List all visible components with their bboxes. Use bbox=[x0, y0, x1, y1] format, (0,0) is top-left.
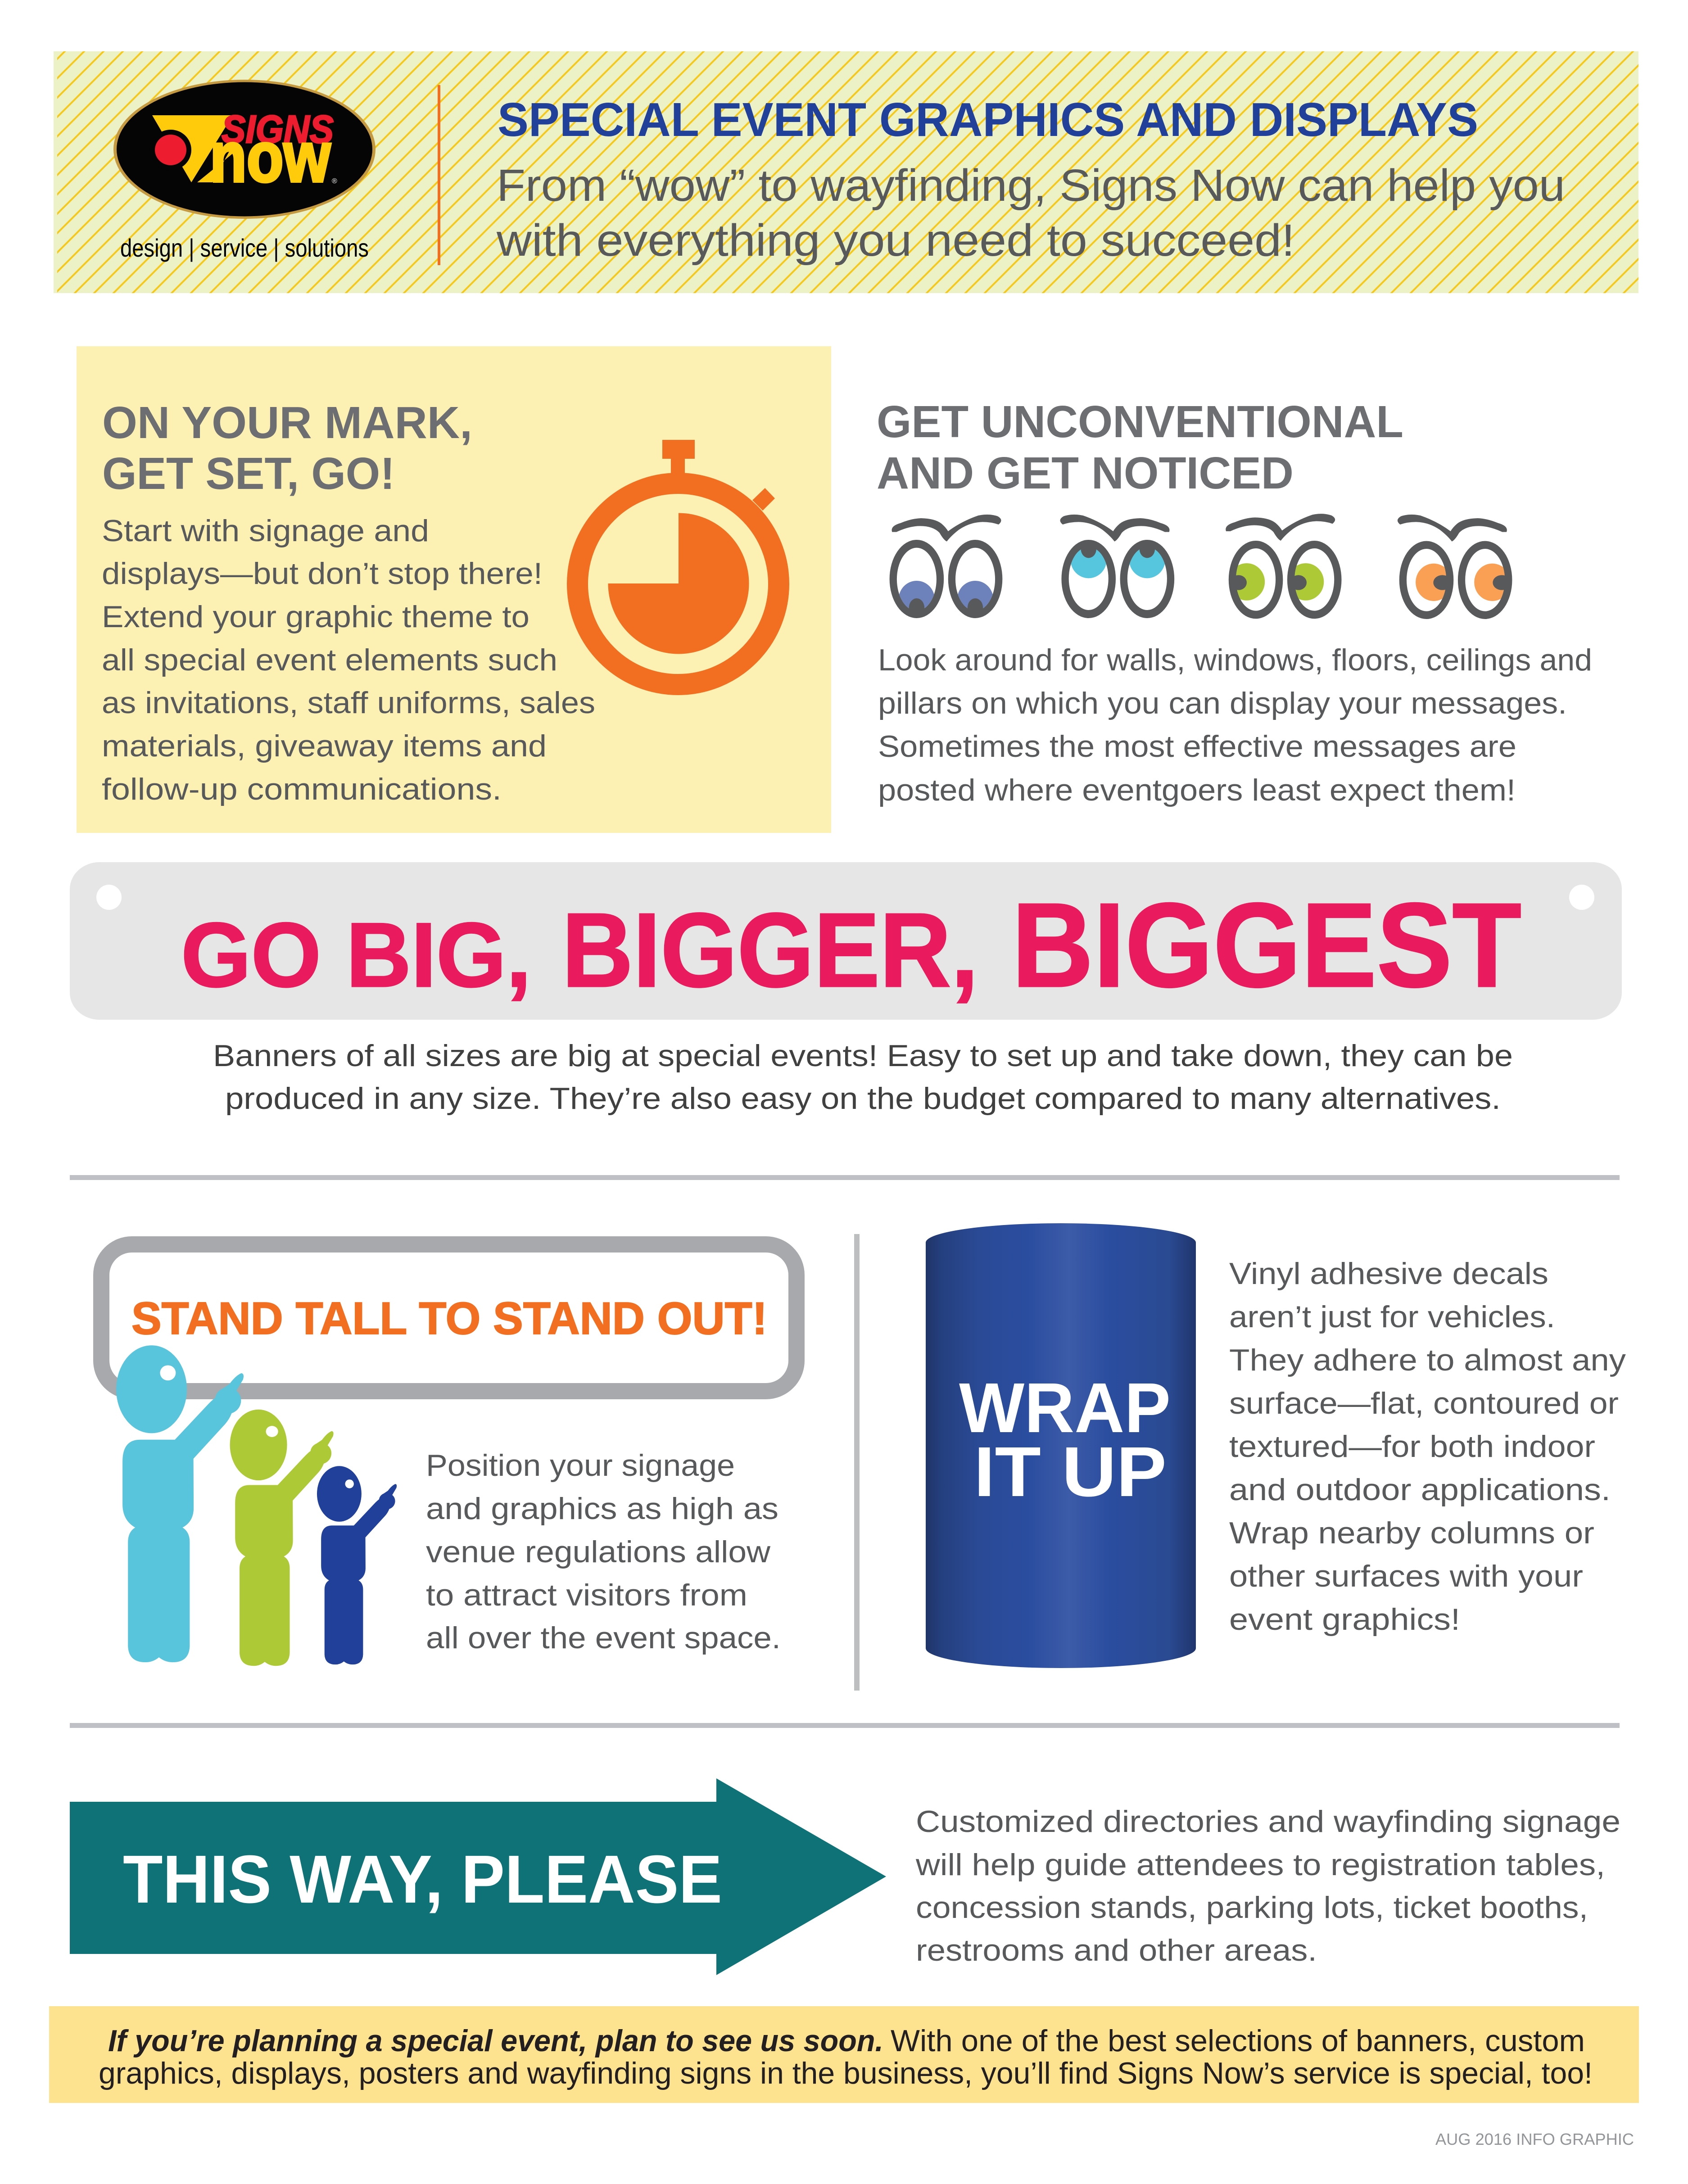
panel: call to action bbox=[49, 2006, 1639, 2103]
heading: on your mark: ON YOUR MARK, bbox=[102, 398, 472, 448]
header divider bbox=[438, 85, 440, 265]
text: stand tall body: to attract visitors from bbox=[426, 1578, 747, 1612]
logo: Signs Now oval bbox=[113, 80, 376, 219]
heading: this way please: THIS WAY, PLEASE bbox=[123, 1841, 722, 1917]
panel: get unconventional bbox=[877, 397, 1592, 807]
heading: wrap it up: WRAP bbox=[959, 1369, 1171, 1447]
icon: wrapped column bbox=[926, 1223, 1196, 1668]
icon: four pairs of eyes bbox=[890, 514, 1512, 619]
person: medium green bbox=[230, 1410, 334, 1666]
logo tagline: design | service | solutions bbox=[120, 234, 369, 262]
text: wrap it up body: other surfaces with your bbox=[1229, 1559, 1583, 1593]
panel: on your mark bbox=[77, 346, 831, 833]
person: tall cyan bbox=[116, 1345, 244, 1662]
text: stand tall body: all over the event space. bbox=[426, 1621, 781, 1655]
text: on your mark body: as invitations, staff uniforms, sales bbox=[102, 686, 595, 720]
icon: stopwatch bbox=[577, 440, 779, 684]
logo: Signs Now oval: now bbox=[210, 118, 331, 197]
heading: go big, bigger, biggest: BIGGEST bbox=[1012, 878, 1521, 1012]
text: wrap it up body: Vinyl adhesive decals bbox=[1229, 1257, 1548, 1291]
text: wrap it up body: event graphics! bbox=[1229, 1602, 1460, 1637]
panel: wrap it up bbox=[926, 1223, 1626, 1668]
title: SPECIAL EVENT GRAPHICS AND DISPLAYS bbox=[498, 93, 1478, 146]
panel: go big banner bbox=[70, 862, 1622, 1020]
text: on your mark body: follow-up communications. bbox=[102, 772, 502, 806]
subtitle bbox=[496, 160, 1565, 266]
text: on your mark body: materials, giveaway items and bbox=[102, 729, 547, 763]
text: stand tall body: venue regulations allow bbox=[426, 1535, 771, 1569]
text: wayfinding body: concession stands, parking lots, ticket booths, bbox=[916, 1890, 1588, 1925]
text: wrap it up body: and outdoor applications. bbox=[1229, 1473, 1611, 1507]
heading: stand tall to stand out: STAND TALL TO STAND OUT! bbox=[131, 1293, 767, 1344]
subtitle: From “wow” to wayfinding, Signs Now can help you bbox=[497, 160, 1565, 211]
panel: this way please bbox=[70, 1778, 1620, 1975]
icon: three pointing people bbox=[116, 1345, 397, 1666]
eyes: looking up bbox=[1060, 515, 1174, 618]
text: wrap it up body: textured—for both indoor bbox=[1229, 1429, 1595, 1464]
text: call to action: If you’re planning a special event, plan to see us soon. bbox=[108, 2024, 883, 2058]
eyes: looking down bbox=[890, 515, 1002, 618]
logo: Signs Now oval: SIGNS bbox=[222, 108, 334, 151]
text: call to action bbox=[99, 2024, 1593, 2090]
text: get unconventional body: posted where eventgoers least expect them! bbox=[878, 773, 1516, 807]
text: banners description: produced in any size. They’re also easy on the budget compared to many alternatives. bbox=[225, 1081, 1501, 1116]
text: wayfinding body: will help guide attendees to registration tables, bbox=[915, 1848, 1605, 1882]
text: on your mark body: Start with signage and bbox=[102, 514, 429, 548]
text: on your mark body: all special event elements such bbox=[102, 643, 557, 677]
text: banners description: Banners of all sizes are big at special events! Easy to set up and take down, they can be bbox=[213, 1039, 1513, 1073]
eyes: looking right bbox=[1398, 515, 1512, 619]
text: wrap it up body: surface—flat, contoured or bbox=[1229, 1386, 1619, 1420]
text: wayfinding body: Customized directories and wayfinding signage bbox=[916, 1804, 1620, 1839]
subtitle: with everything you need to succeed! bbox=[496, 215, 1295, 266]
text: wrap it up body bbox=[1229, 1257, 1626, 1637]
text: get unconventional body: Look around for walls, windows, floors, ceilings and bbox=[878, 643, 1592, 677]
eyes: looking left bbox=[1226, 514, 1341, 619]
text: stand tall body: Position your signage bbox=[426, 1448, 735, 1483]
person: small blue bbox=[317, 1466, 397, 1664]
heading: go big, bigger, biggest: GO BIG, bbox=[181, 904, 531, 1006]
text: wrap it up body: They adhere to almost any bbox=[1229, 1343, 1626, 1377]
text: wrap it up body: Wrap nearby columns or bbox=[1229, 1516, 1594, 1550]
text: call to action: graphics, displays, posters and wayfinding signs in the business, you’ll find Signs Now’s service is special, too! bbox=[99, 2056, 1593, 2090]
text: wayfinding body: restrooms and other areas. bbox=[916, 1933, 1317, 1967]
arrow bbox=[70, 1778, 886, 1975]
text: on your mark body: displays—but don’t stop there! bbox=[102, 556, 543, 591]
heading: get unconventional: GET UNCONVENTIONAL bbox=[877, 397, 1403, 447]
heading: go big, bigger, biggest bbox=[181, 878, 1521, 1012]
heading: on your mark: GET SET, GO! bbox=[102, 448, 395, 499]
text: stand tall body bbox=[426, 1448, 781, 1655]
heading: wrap it up bbox=[959, 1369, 1171, 1511]
heading: wrap it up: IT UP bbox=[974, 1433, 1167, 1511]
heading: on your mark bbox=[102, 398, 472, 499]
heading: get unconventional bbox=[877, 397, 1403, 498]
text: stand tall body: and graphics as high as bbox=[426, 1492, 778, 1526]
text: call to action: With one of the best selections of banners, custom bbox=[891, 2024, 1585, 2058]
sign frame bbox=[101, 1244, 796, 1391]
panel: stand tall bbox=[101, 1244, 796, 1666]
text: on your mark body: Extend your graphic theme to bbox=[102, 600, 529, 634]
text: get unconventional body bbox=[878, 643, 1592, 807]
text: wrap it up body: aren’t just for vehicles. bbox=[1229, 1300, 1555, 1334]
text: get unconventional body: Sometimes the most effective messages are bbox=[878, 729, 1516, 764]
footer note: AUG 2016 INFO GRAPHIC bbox=[1435, 2130, 1634, 2148]
text: banners description bbox=[213, 1039, 1513, 1116]
heading: go big, bigger, biggest: BIGGER, bbox=[562, 891, 978, 1009]
text: on your mark body bbox=[102, 514, 595, 806]
heading: get unconventional: AND GET NOTICED bbox=[877, 448, 1294, 498]
panel: header band bbox=[54, 51, 1638, 293]
text: get unconventional body: pillars on which you can display your messages. bbox=[878, 686, 1567, 720]
logo: Signs Now oval: ® bbox=[332, 177, 337, 185]
text: wayfinding body bbox=[915, 1804, 1620, 1967]
